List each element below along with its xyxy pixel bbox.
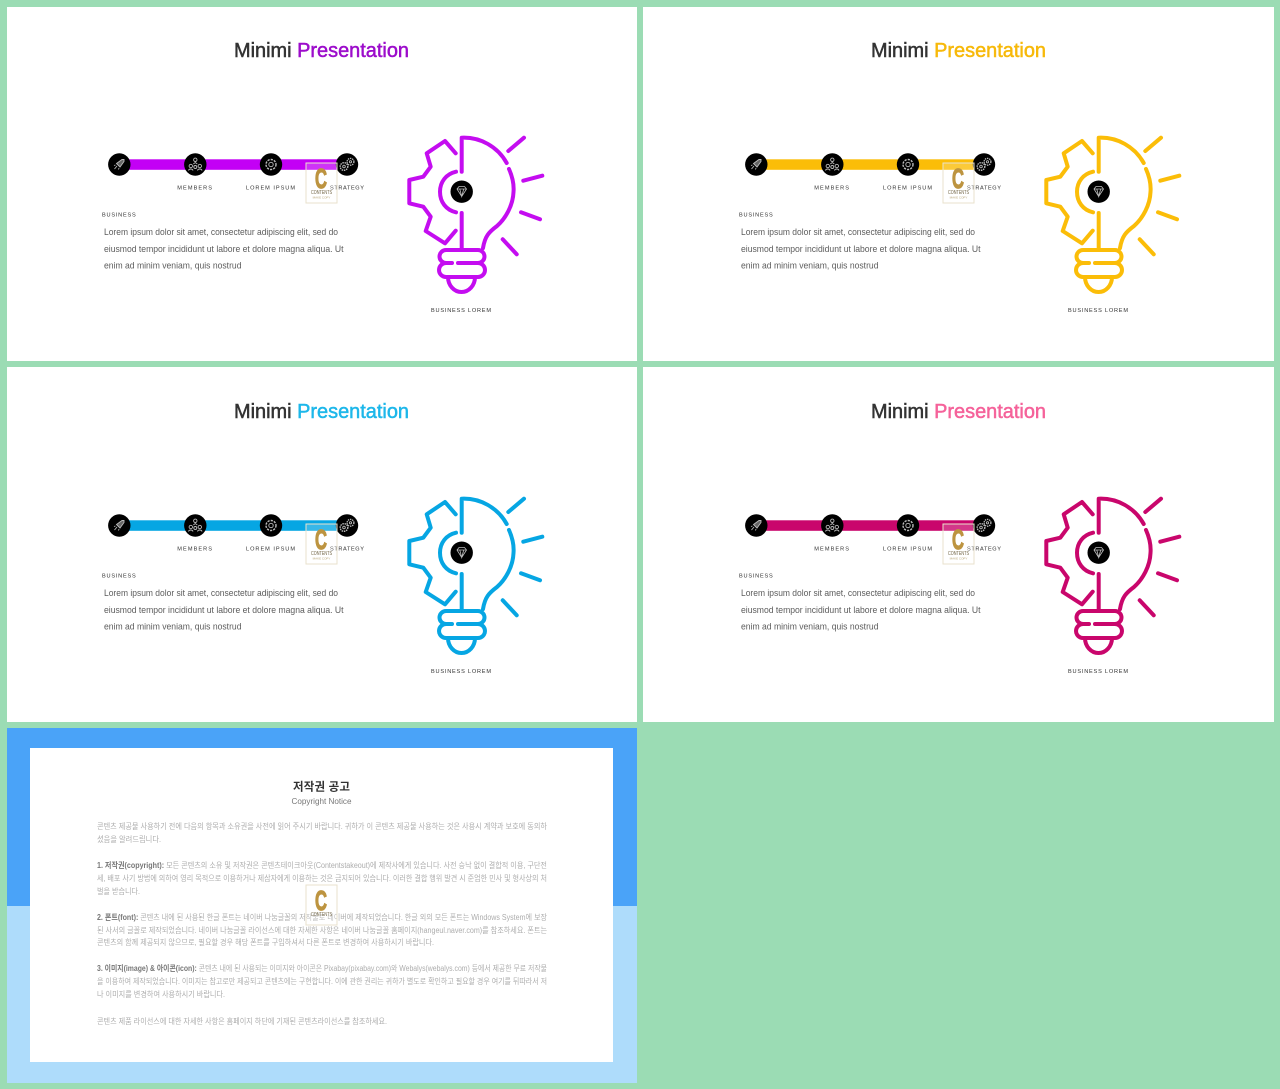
timeline labels: MEMBERS: [177, 546, 212, 552]
timeline icons: [108, 514, 358, 537]
watermark: C: [952, 163, 964, 194]
timeline bar: [756, 520, 978, 531]
timeline icons: [745, 153, 995, 176]
subheading: BUSINESS: [102, 573, 136, 579]
intro paragraph: [97, 821, 548, 844]
section: copyright: 벌을 받습니다.: [97, 886, 140, 896]
timeline bar: [119, 159, 341, 170]
bulb caption: BUSINESS LOREM: [431, 669, 491, 675]
intro paragraph: 셨음을 알려드립니다.: [97, 834, 161, 844]
body text: eiusmod tempor incididunt ut labore et dolore magna aliqua. Ut: [741, 604, 981, 615]
watermark: [306, 885, 337, 925]
timeline labels: LOREM IPSUM: [883, 185, 932, 191]
section: copyright: 세, 배포 사기 방법에 의하여 영리 목적으로 이용하거나 제삼자에게 이용하는 것은 금지되어 있습니다. 이러한 결합 행위 발견 시 준엄한 민사 및 형사상의 처: [97, 873, 547, 883]
panel: yellow slide: [643, 7, 1274, 361]
timeline labels: [177, 185, 364, 191]
intro paragraph: 콘텐츠 제공물 사용하기 전에 다음의 항목과 소유권을 사전에 읽어 주시기 바랍니다. 귀하가 이 콘텐츠 제공물 사용하는 것은 사용시 계약과 보호에 동의하: [97, 821, 548, 831]
section: image and icon: 3. 이미지(image) & 아이콘(icon): 콘텐츠 내에 된 사용되는 이미지와 아이콘은 Pixabay(pixabay.com)와 Webalys(webalys.com) 등에서 제공한 무료 저작물: [97, 963, 547, 973]
watermark: MAKE COPY: [950, 196, 967, 200]
notice subheading: Copyright Notice: [292, 797, 352, 806]
section: copyright: 1. 저작권(copyright): 모든 콘텐츠의 소유 및 저작권은 콘텐츠테이크아웃(Contentstakeout)에 제작사에게 있습니다. 사전 승낙 없이 결합적 이용, 구단전: [97, 860, 547, 870]
watermark: MAKE COPY: [950, 556, 967, 560]
subheading: BUSINESS: [739, 573, 773, 579]
title: Minimi Presentation: [871, 401, 1046, 423]
subheading: BUSINESS: [739, 212, 773, 218]
timeline labels: [814, 185, 1001, 191]
timeline icons: [745, 514, 995, 537]
timeline labels: STRATEGY: [330, 546, 364, 552]
watermark: [943, 163, 974, 203]
bulb caption: BUSINESS LOREM: [431, 308, 491, 314]
timeline labels: LOREM IPSUM: [246, 546, 295, 552]
section: image and icon: 나 이미지를 변경하여 사용하시기 바랍니다.: [97, 989, 225, 999]
notice heading: 저작권 공고: [293, 780, 350, 794]
title: Minimi Presentation: [871, 40, 1046, 62]
subheading: BUSINESS: [102, 212, 136, 218]
watermark: CONTENTS: [311, 912, 332, 918]
watermark: C: [315, 885, 327, 916]
body text: enim ad minim veniam, quis nostrud: [741, 260, 878, 270]
body text: eiusmod tempor incididunt ut labore et dolore magna aliqua. Ut: [104, 243, 344, 254]
body text: [104, 226, 344, 270]
body text: Lorem ipsum dolor sit amet, consectetur adipiscing elit, sed do: [104, 226, 338, 237]
watermark: CONTENTS: [948, 190, 969, 196]
body text: Lorem ipsum dolor sit amet, consectetur adipiscing elit, sed do: [741, 226, 975, 237]
watermark: C: [315, 524, 327, 555]
body text: eiusmod tempor incididunt ut labore et dolore magna aliqua. Ut: [104, 604, 344, 615]
watermark: MAKE COPY: [313, 556, 330, 560]
icon: light bulb with gear: [409, 138, 542, 292]
body text: [741, 587, 981, 632]
section: image and icon: [97, 963, 547, 999]
watermark: CONTENTS: [311, 551, 332, 557]
body text: Lorem ipsum dolor sit amet, consectetur adipiscing elit, sed do: [741, 587, 975, 598]
bulb caption: BUSINESS LOREM: [1068, 308, 1128, 314]
timeline labels: MEMBERS: [814, 546, 849, 552]
body text: enim ad minim veniam, quis nostrud: [104, 620, 242, 632]
watermark: C: [315, 163, 327, 194]
panel: blue slide: [7, 367, 637, 722]
panel: pink slide: [643, 367, 1274, 722]
section: copyright: [97, 860, 547, 896]
section: font: 콘텐츠의 함께 제공되지 않으므로, 필요할 경우 해당 폰트를 구입하셔서 다른 폰트로 변경하여 사용하시기 바랍니다.: [97, 937, 434, 947]
watermark: MAKE COPY: [313, 196, 330, 200]
watermark: C: [952, 524, 964, 555]
body text: Lorem ipsum dolor sit amet, consectetur adipiscing elit, sed do: [104, 587, 338, 598]
body text: [741, 226, 981, 270]
watermark: CONTENTS: [311, 190, 332, 196]
body text: eiusmod tempor incididunt ut labore et dolore magna aliqua. Ut: [741, 243, 981, 254]
body text: enim ad minim veniam, quis nostrud: [741, 620, 878, 632]
timeline icons: [108, 153, 358, 176]
timeline labels: LOREM IPSUM: [246, 185, 295, 191]
timeline labels: MEMBERS: [814, 185, 849, 191]
title: Minimi Presentation: [234, 40, 409, 62]
icon: light bulb with gear: [1046, 499, 1179, 653]
watermark: [306, 524, 337, 564]
timeline labels: STRATEGY: [967, 546, 1001, 552]
timeline labels: LOREM IPSUM: [883, 546, 932, 552]
icon: light bulb with gear: [409, 499, 542, 653]
title: Minimi Presentation: [234, 401, 409, 423]
section: font: 된 사서의 글꼴로 제작되었습니다. 네이버 나눔글꼴 라이선스에 대한 자세한 사항은 네이버 나눔글꼴 홈페이지(hangeul.naver.com)를 참조하세요. 폰트는: [97, 925, 547, 935]
icon: light bulb with gear: [1046, 138, 1179, 292]
timeline bar: [756, 159, 978, 170]
timeline labels: MEMBERS: [177, 185, 212, 191]
timeline labels: [814, 546, 1001, 552]
closing line: 콘텐츠 제품 라이선스에 대한 자세한 사항은 홈페이지 하단에 기재된 콘텐츠라이선스를 참조하세요.: [97, 1016, 387, 1026]
watermark: [943, 524, 974, 564]
panel: purple slide: [7, 7, 637, 361]
timeline labels: STRATEGY: [330, 185, 364, 191]
section: font: [97, 912, 548, 947]
body text: enim ad minim veniam, quis nostrud: [104, 260, 242, 270]
timeline labels: [177, 546, 364, 552]
bulb caption: BUSINESS LOREM: [1068, 669, 1128, 675]
watermark: CONTENTS: [948, 551, 969, 557]
watermark: [306, 163, 337, 203]
section: image and icon: 을 이용하여 제작되었습니다. 이미지는 참고로만 제공되고 콘텐츠에는 구현합니다. 이에 관한 권리는 귀하가 별도로 확인하고 필요할 경우 여기를 뒤따라서 저: [97, 976, 547, 986]
panel: copyright notice: [7, 728, 637, 1083]
body text: [104, 587, 344, 632]
timeline labels: STRATEGY: [967, 185, 1001, 191]
section: font: 2. 폰트(font): 콘텐츠 내에 된 사용된 한글 폰트는 네이버 나눔글꼴의 저작물로 네이버에 제작되었습니다. 한글 외의 모든 폰트는 Windows System에 보장: [97, 912, 548, 922]
timeline bar: [119, 520, 341, 531]
